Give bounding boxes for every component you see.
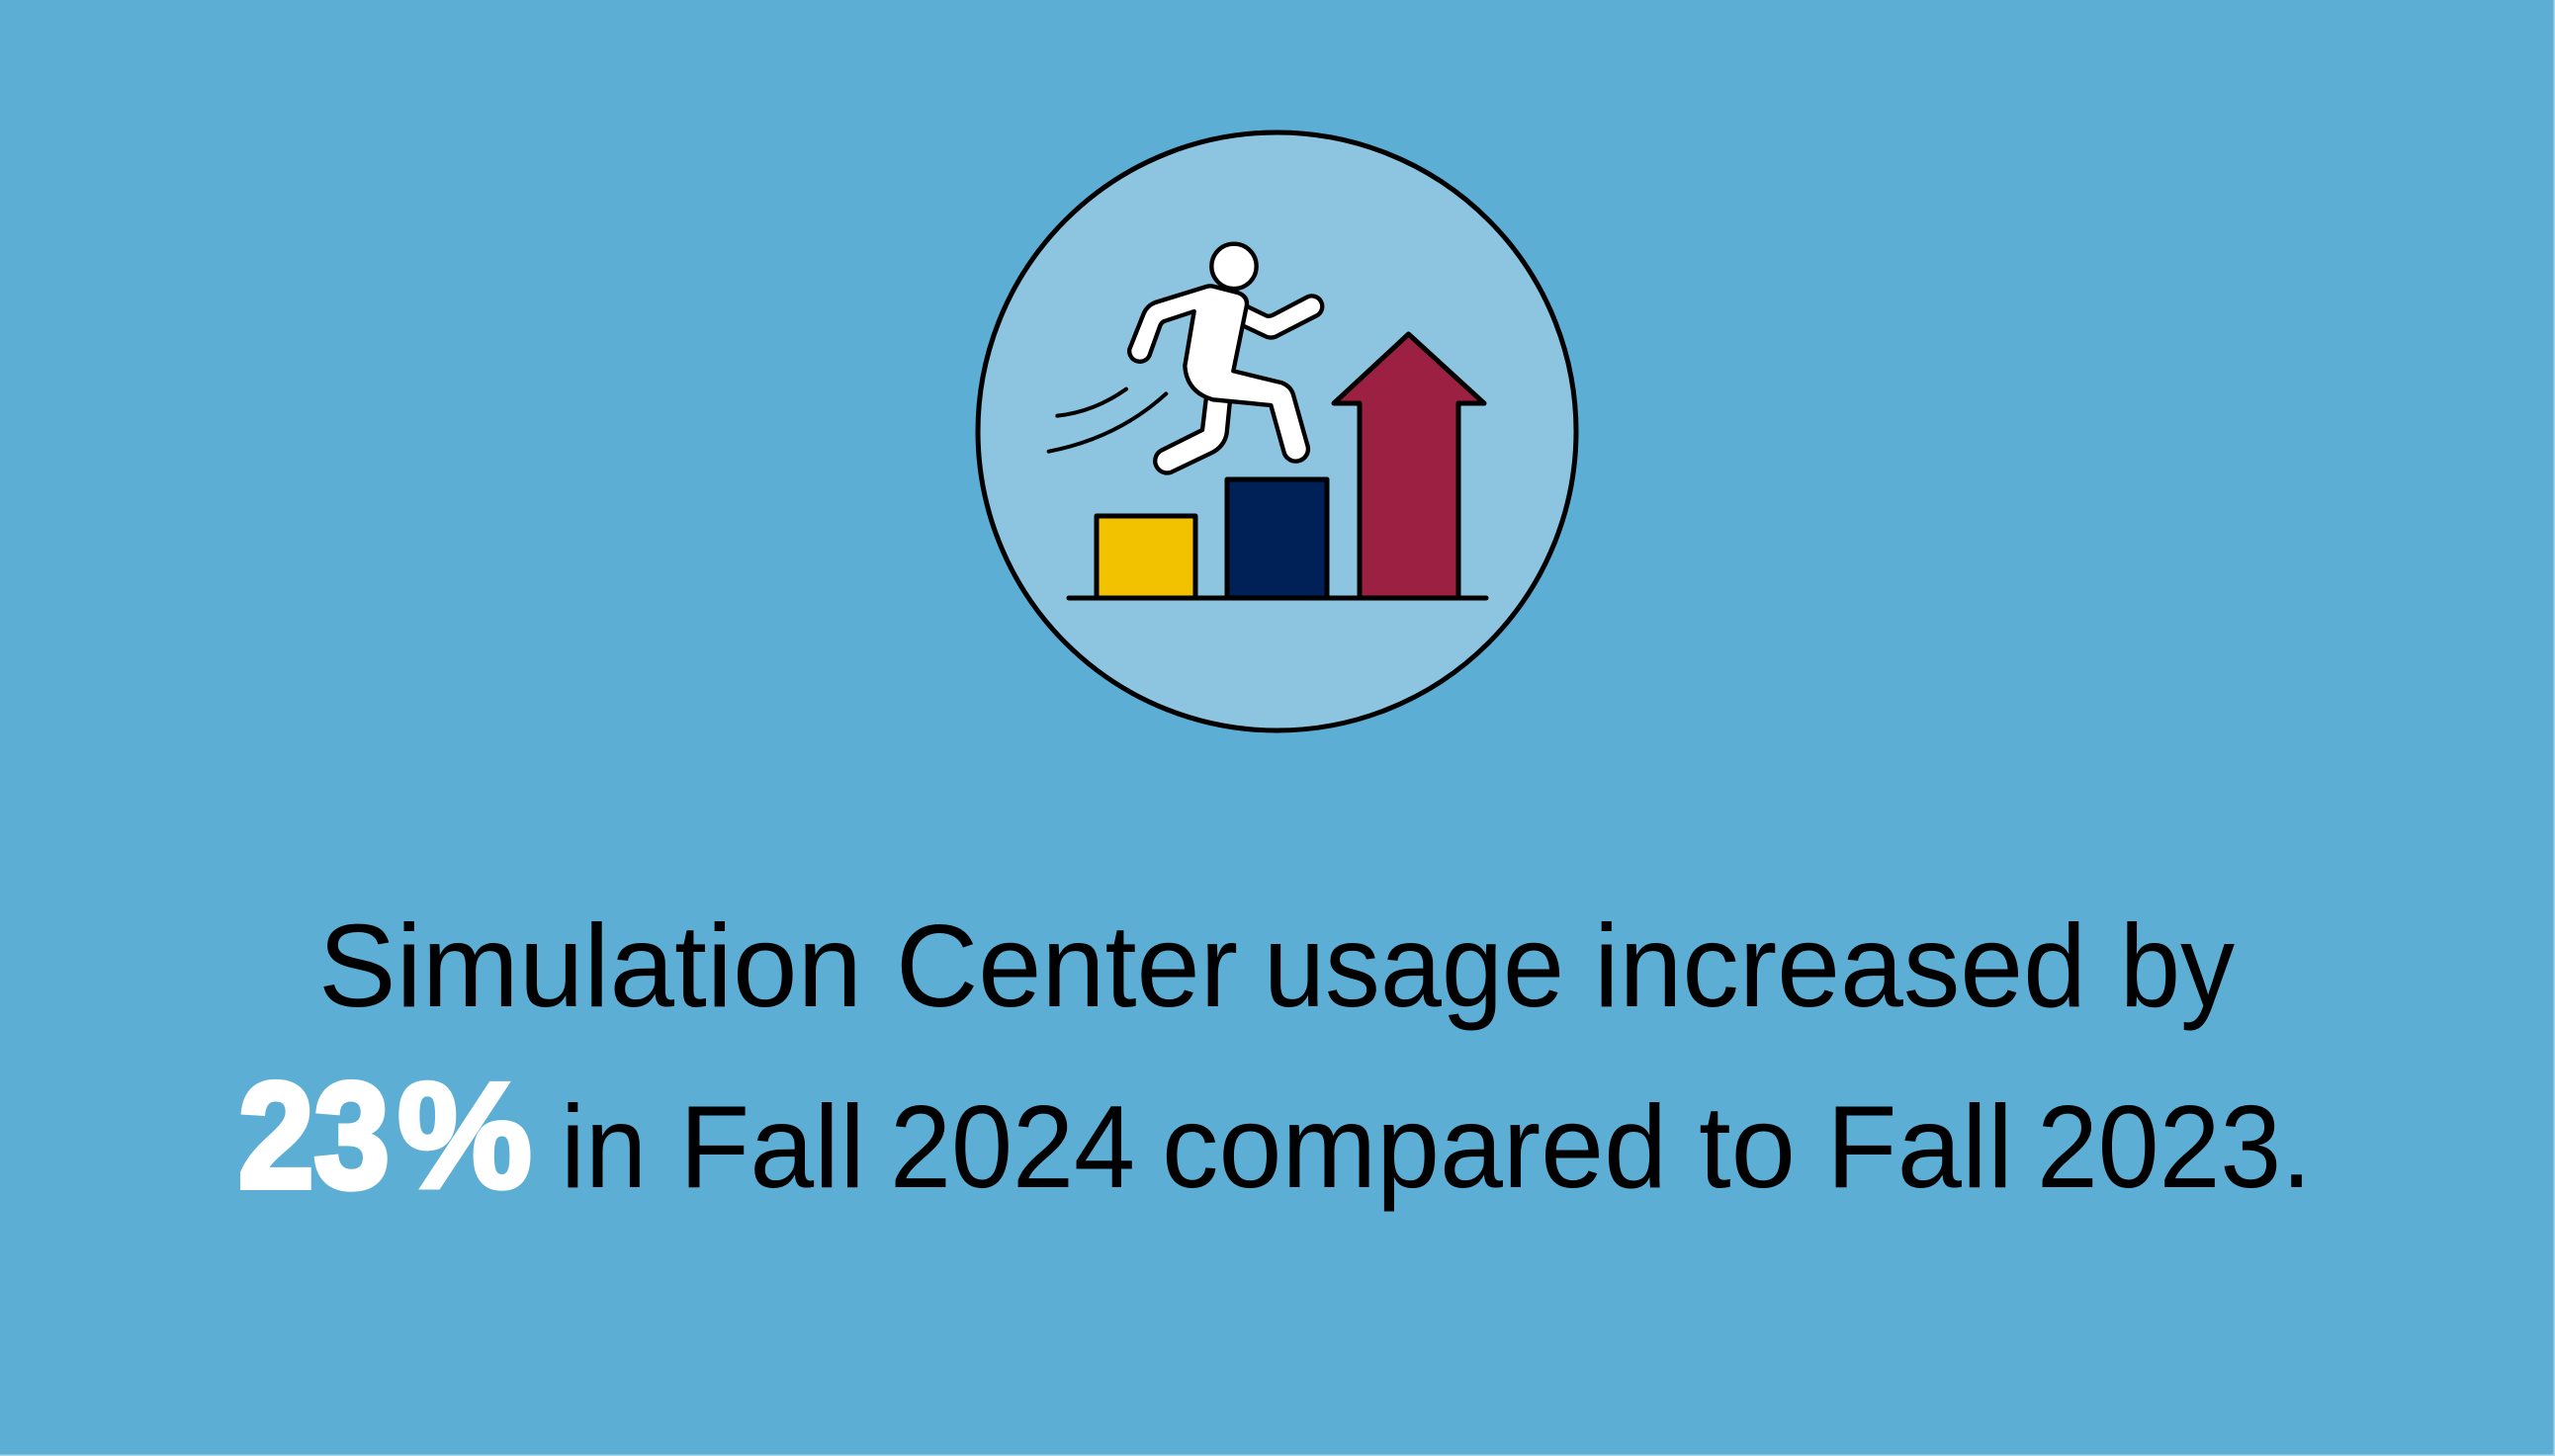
line 2: in — [561, 1081, 647, 1213]
maroon arrow — [1334, 334, 1484, 598]
line 2: to — [1699, 1081, 1796, 1213]
highlight: 23%: 23 — [238, 1052, 390, 1220]
icon background circle — [978, 132, 1576, 730]
ground line — [1069, 595, 1486, 601]
icon: runner leaping up bars — [978, 132, 1576, 730]
line 1: usage — [1264, 900, 1564, 1032]
back arm — [1243, 296, 1322, 338]
running figure — [1049, 244, 1322, 472]
line 1: Center — [896, 900, 1238, 1032]
line 1 — [318, 900, 2235, 1032]
line 2 — [238, 1052, 2312, 1220]
motion lines — [1049, 389, 1166, 452]
line 2: compared — [1162, 1081, 1667, 1213]
statement text — [238, 900, 2312, 1220]
highlight: 23% — [238, 1052, 532, 1220]
line 2: 2024 — [890, 1081, 1135, 1213]
line 2: Fall — [1826, 1081, 2013, 1213]
back leg — [1155, 397, 1230, 472]
line 2: 2023. — [2037, 1081, 2312, 1213]
head — [1211, 244, 1257, 289]
line 2: Fall — [679, 1081, 865, 1213]
highlight: 23%: % — [397, 1052, 532, 1220]
yellow bar — [1097, 516, 1195, 598]
line 1: increased — [1594, 900, 2086, 1032]
torso and front limbs — [1129, 286, 1308, 462]
line 1: Simulation — [318, 900, 862, 1032]
line 1: by — [2120, 900, 2235, 1032]
navy bar — [1227, 479, 1327, 598]
